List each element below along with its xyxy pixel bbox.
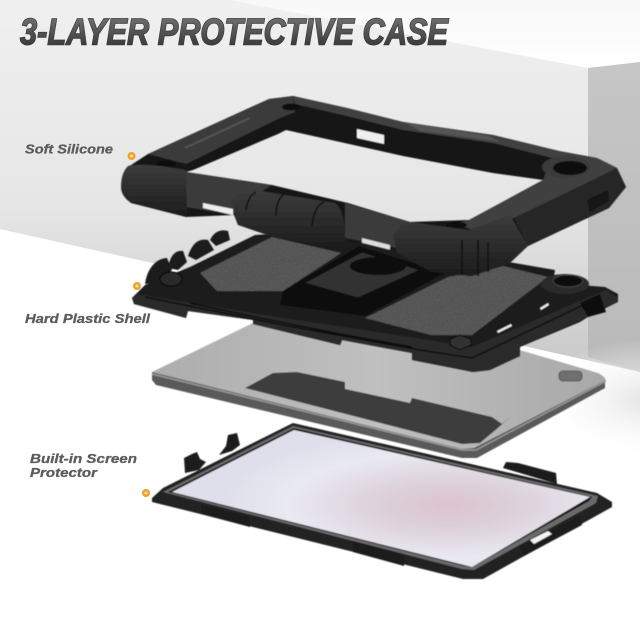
left rail top <box>148 96 295 164</box>
dark reflection on tablet <box>245 372 512 444</box>
tablet top surface <box>152 312 606 449</box>
label: built-in screen protector: Built-in Screen <box>30 451 137 466</box>
protector bottom latches <box>201 505 582 566</box>
shell body <box>132 232 618 372</box>
shell knob right <box>541 274 589 294</box>
left corner bumper <box>121 165 187 216</box>
centre strap bumper <box>231 190 345 249</box>
front bar right <box>345 203 410 248</box>
kickstand <box>280 246 445 316</box>
shell screw <box>450 335 471 350</box>
side window <box>587 190 609 212</box>
left textured panel <box>200 237 341 291</box>
shell knob left <box>160 272 182 286</box>
marker: soft silicone <box>128 152 136 160</box>
marker: hard plastic shell <box>133 282 141 290</box>
front bar slot <box>203 203 233 215</box>
camera ring <box>542 156 590 178</box>
label: soft silicone: Soft Silicone <box>25 142 113 156</box>
front bar lower slot <box>362 238 390 250</box>
right tab <box>580 294 606 317</box>
right textured panel <box>365 266 548 335</box>
back rail top <box>293 96 597 165</box>
right rail top <box>455 158 617 232</box>
shell front rim <box>132 290 618 372</box>
tablet rim highlight <box>152 374 606 450</box>
layer: screen protector <box>152 423 612 579</box>
window slot <box>357 129 384 144</box>
shell slots <box>497 303 549 333</box>
layer: soft silicone frame <box>121 96 626 276</box>
right rail side <box>514 168 626 246</box>
frame body <box>121 96 626 250</box>
layer: tablet <box>152 312 606 458</box>
label: built-in screen protector: Protector <box>30 465 98 480</box>
shell clips <box>145 230 230 284</box>
title: 3-LAYER PROTECTIVE CASE <box>20 12 449 52</box>
protector glass <box>172 430 590 567</box>
tablet body edge <box>152 372 605 458</box>
protector grey bezel <box>163 426 598 570</box>
layer: hard plastic shell <box>132 230 618 372</box>
protector black frame <box>152 423 612 579</box>
front right corner bumper <box>393 215 528 276</box>
marker: screen protector <box>142 489 150 497</box>
label: built-in screen protector <box>30 451 137 480</box>
front bar left <box>186 172 272 215</box>
screw holes <box>156 104 467 228</box>
protector notch <box>530 531 552 544</box>
rim groove lines <box>145 297 600 358</box>
raised back button <box>404 122 500 142</box>
label: hard plastic shell: Hard Plastic Shell <box>25 311 150 326</box>
left rail detail strip <box>185 118 250 148</box>
camera bump <box>559 371 582 381</box>
protector clips <box>184 433 557 484</box>
